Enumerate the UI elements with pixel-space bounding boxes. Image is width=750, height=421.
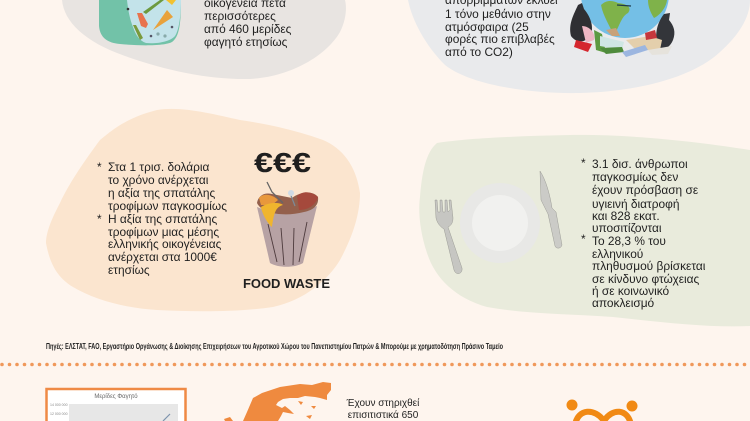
icon: food jar: [99, 0, 181, 45]
map: Greece: [224, 382, 331, 421]
chart axis labels: 12 000 000: [50, 412, 68, 416]
panel: hunger and poverty (green blob): [419, 135, 750, 326]
icon: orange logo: [566, 400, 638, 421]
text: cost of waste: η αξία της σπατάλης: [108, 186, 215, 200]
text: methane: [445, 0, 558, 59]
text: hunger and poverty: Το 28,3 % του: [592, 234, 666, 248]
chart title: Μερίδες Φαγητό: [94, 393, 138, 400]
heading: euro symbols: €€€: [254, 147, 312, 178]
panel: methane (blue-grey blob): [408, 0, 750, 93]
text: meals supported: [346, 397, 420, 421]
text: hunger and poverty: έχουν πρόσβαση σε: [592, 183, 699, 197]
chart axis labels: [50, 403, 68, 416]
text: hunger and poverty: υγιεινή διατροφή: [592, 197, 679, 211]
text: cost of waste: τροφίμων μιας μέσης: [108, 225, 219, 239]
text: hunger and poverty: *: [581, 156, 586, 170]
text: meals supported: επισιτιστικά 650: [348, 409, 419, 421]
text: hunger and poverty: ελληνικού: [592, 247, 643, 261]
text: hunger and poverty: ή σε κοινωνικό: [592, 284, 670, 298]
text: cost of waste: Στα 1 τρισ. δολάρια: [108, 160, 210, 174]
text: cost of waste: το χρόνο ανέρχεται: [108, 173, 209, 187]
text: cost of waste: *: [97, 160, 102, 174]
text: hunger and poverty: και 828 εκατ.: [592, 209, 660, 223]
icon: knife: [540, 171, 562, 248]
text: food portions: φαγητό ετησίως: [204, 35, 288, 49]
text: hunger and poverty: υποσιτίζονται: [592, 221, 662, 235]
text: hunger and poverty: *: [581, 232, 586, 246]
chart: food portions: [46, 389, 186, 421]
text: methane: φορές πιο επιβλαβές: [445, 32, 555, 46]
text: food portions: από 460 μερίδες: [204, 22, 292, 36]
source note: Πηγές: ΕΛΣΤΑΤ, FAO, Εργαστήριο Οργάνωσης & Διοίκησης Επιχειρήσεων του Αγροτικού Χώρου του Πανεπιστημίου Πατρών & Μπορούμε με χρηματοδότηση Πράσινο Ταμείο: [46, 342, 503, 351]
text: cost of waste: *: [97, 212, 102, 226]
icon: fork: [435, 200, 462, 274]
text: hunger and poverty: 3.1 δισ. άνθρωποι: [592, 157, 688, 171]
text: hunger and poverty: σε κίνδυνο φτώχειας: [592, 272, 700, 286]
text: hunger and poverty: παγκοσμίως δεν: [592, 170, 678, 184]
text: meals supported: Έχουν στηριχθεί: [346, 397, 420, 409]
icon: food waste bin: [257, 182, 318, 267]
text: cost of waste: Η αξία της σπατάλης: [108, 212, 217, 226]
chart axis labels: 14 000 000: [50, 403, 68, 407]
panel: cost of waste (peach blob): [46, 109, 360, 311]
label: food waste: FOOD WASTE: [243, 276, 330, 291]
panel: food portions (grey blob): [62, 0, 346, 79]
icon: globe with rubbish: [570, 0, 674, 57]
text: hunger and poverty: [581, 156, 706, 310]
text: cost of waste: ανέρχεται στα 1000€: [108, 250, 217, 264]
text: cost of waste: ετησίως: [108, 263, 150, 277]
text: cost of waste: τροφίμων παγκοσμίως: [108, 199, 227, 213]
text: methane: ατμόσφαιρα (25: [445, 20, 529, 34]
text: methane: από το CO2): [445, 45, 513, 59]
text: methane: 1 τόνο μεθάνιο στην: [445, 7, 551, 21]
map islands: [224, 401, 316, 421]
text: food portions: περισσότερες: [204, 9, 276, 23]
text: food portions: [204, 0, 292, 49]
text: hunger and poverty: αποκλεισμό: [592, 296, 655, 310]
text: cost of waste: [97, 160, 227, 277]
text: hunger and poverty: πληθυσμού βρίσκεται: [592, 259, 706, 273]
icon: plate: [460, 183, 540, 263]
text: cost of waste: ελληνικής οικογένειας: [108, 237, 222, 251]
